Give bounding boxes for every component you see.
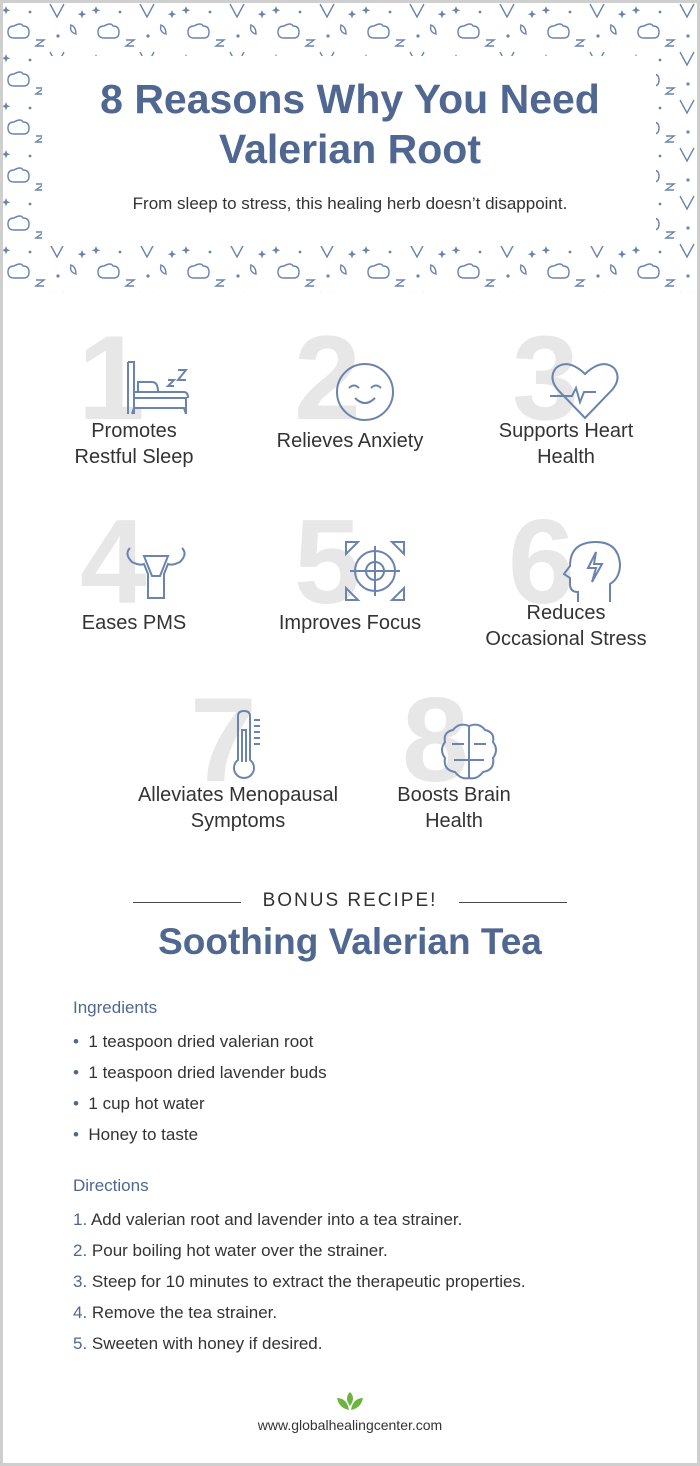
label: Boosts Brain xyxy=(397,784,511,806)
reason 4: 4 xyxy=(80,495,147,629)
title: Valerian Root xyxy=(219,126,481,172)
icon: uterus xyxy=(126,547,186,599)
ingredients: • 1 teaspoon dried valerian root xyxy=(73,1032,313,1051)
reason 6 xyxy=(485,495,647,650)
reason 3 xyxy=(499,311,634,468)
label xyxy=(485,602,647,650)
reason 5: 5 xyxy=(294,495,361,629)
label xyxy=(499,420,634,468)
icon: brain xyxy=(441,724,497,780)
directions: 4. Remove the tea strainer. xyxy=(73,1303,277,1322)
label: Symptoms xyxy=(191,810,285,832)
reason 4 xyxy=(80,495,186,634)
subtitle: From sleep to stress, this healing herb doesn’t disappoint. xyxy=(133,194,567,213)
reason 1: 1 xyxy=(78,311,145,445)
footer logo and url: www.globalhealingcenter.com xyxy=(258,1417,442,1433)
directions: 5. Sweeten with honey if desired. xyxy=(73,1334,322,1353)
reason 3: 3 xyxy=(512,311,579,445)
title xyxy=(100,76,600,172)
bonus recipe heading: BONUS RECIPE! xyxy=(263,890,437,911)
label: Health xyxy=(537,446,595,468)
label: Supports Heart xyxy=(499,420,633,442)
label: Occasional Stress xyxy=(485,628,647,650)
label: Health xyxy=(425,810,483,832)
label: Eases PMS xyxy=(82,612,186,634)
reason 1 xyxy=(75,311,193,468)
ingredients xyxy=(73,998,327,1144)
directions: 1. Add valerian root and lavender into a tea strainer. xyxy=(73,1210,462,1229)
label: Reduces xyxy=(527,602,605,624)
icon: target xyxy=(345,541,405,601)
icon: leaf xyxy=(337,1392,363,1410)
label xyxy=(75,420,193,468)
ingredients: Ingredients xyxy=(73,998,157,1017)
label xyxy=(397,784,511,832)
label: Alleviates Menopausal xyxy=(138,784,338,806)
label xyxy=(138,784,338,832)
reason 2 xyxy=(277,311,424,452)
reason 8 xyxy=(397,673,511,832)
ingredients: • 1 teaspoon dried lavender buds xyxy=(73,1063,327,1082)
reason 8: 8 xyxy=(402,673,469,807)
directions: 2. Pour boiling hot water over the strainer. xyxy=(73,1241,388,1260)
directions xyxy=(73,1176,526,1353)
reason 7: 7 xyxy=(190,673,257,807)
reason 6: 6 xyxy=(508,495,575,629)
reason 5 xyxy=(279,495,421,634)
ingredients: • 1 cup hot water xyxy=(73,1094,205,1113)
directions: 3. Steep for 10 minutes to extract the therapeutic properties. xyxy=(73,1272,526,1291)
recipe title: Soothing Valerian Tea xyxy=(158,921,542,962)
icon: bed xyxy=(127,361,189,414)
icon: thermometer xyxy=(233,710,260,779)
icon: smile xyxy=(336,363,394,421)
ingredients: • Honey to taste xyxy=(73,1125,198,1144)
title: 8 Reasons Why You Need xyxy=(100,76,600,122)
label: Improves Focus xyxy=(279,612,421,634)
footer logo and url xyxy=(258,1392,442,1433)
reason 7 xyxy=(138,673,338,832)
icon: heart xyxy=(550,363,619,420)
header pattern xyxy=(3,4,694,292)
reason 2: 2 xyxy=(294,311,361,445)
directions: Directions xyxy=(73,1176,149,1195)
label: Restful Sleep xyxy=(75,446,193,468)
icon: head xyxy=(562,541,621,602)
label: Promotes xyxy=(91,420,177,442)
label: Relieves Anxiety xyxy=(277,430,423,452)
